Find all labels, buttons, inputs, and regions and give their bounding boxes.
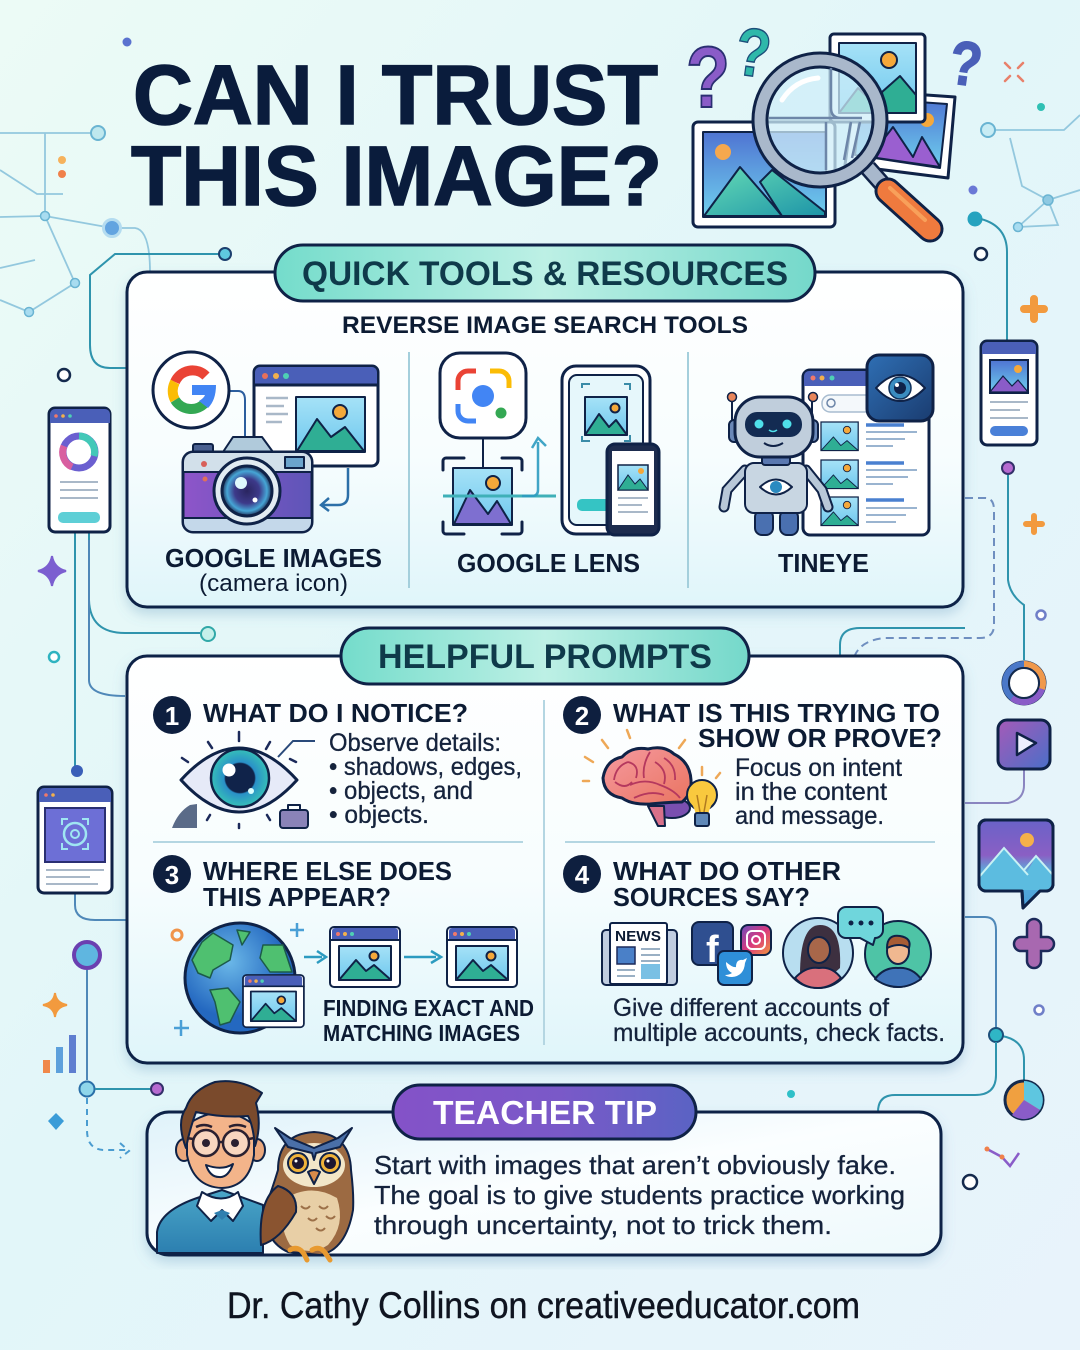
top photo [830, 34, 925, 122]
side card: image scan tablet [38, 787, 112, 893]
label: tineye: TINEYE [778, 548, 869, 578]
prompt 1: what do I notice [153, 696, 522, 829]
prompt 1: what do I notice: • objects. [329, 801, 429, 829]
tip text: The goal is to give students practice working [374, 1180, 905, 1210]
icon: eye [172, 732, 315, 828]
prompt 3: where else does this appear: 3 [165, 860, 179, 890]
tool: tineye [724, 355, 933, 535]
heading pill: helpful prompts: HELPFUL PROMPTS [378, 638, 712, 676]
prompt 4: what do other sources say: Give different accounts of [613, 994, 889, 1022]
icon: social media [692, 922, 771, 985]
icon: social media: f [706, 929, 719, 971]
prompt 3: where else does this appear: WHERE ELSE DOES [203, 856, 452, 886]
icon: brain and light bulb [583, 730, 720, 826]
panel: teacher tip [147, 1081, 941, 1260]
side card: phone with image [981, 341, 1037, 445]
heading pill: teacher tip [393, 1085, 696, 1139]
side icon: image speech bubble [979, 820, 1053, 908]
prompt 4: what do other sources say: 4 [575, 860, 590, 890]
icon: newspaper: NEWS [615, 928, 661, 945]
ring [1002, 660, 1046, 706]
prompt 1: what do I notice: Observe details: [329, 729, 501, 757]
prompt 1: what do I notice: WHAT DO I NOTICE? [203, 698, 468, 728]
label: google images: GOOGLE IMAGES [165, 543, 382, 573]
icon: magnifying glass over images with question marks: ? [730, 13, 776, 93]
prompt 1: what do I notice: • shadows, edges, [329, 753, 522, 781]
prompt 4: what do other sources say: multiple accounts, check facts. [613, 1019, 945, 1047]
footer credit: Dr. Cathy Collins on creativeeducator.com [227, 1285, 860, 1326]
prompt 1: what do I notice: 1 [165, 701, 179, 731]
prompt 1: what do I notice: • objects, and [329, 777, 473, 805]
prompt 2: what is this trying to show or prove: SHOW OR PROVE? [698, 723, 942, 753]
right photo [845, 90, 955, 178]
illustration: owl [261, 1128, 353, 1260]
tip text: through uncertainty, not to trick them. [374, 1210, 832, 1240]
prompt 4: what do other sources say: SOURCES SAY? [613, 882, 810, 912]
icon: newspaper [602, 923, 677, 985]
lens [760, 60, 880, 180]
prompt 3: where else does this appear: THIS APPEAR? [203, 882, 391, 912]
tip text [374, 1150, 905, 1240]
icon: matching image windows with arrows [304, 927, 517, 987]
heading pill: quick tools: QUICK TOOLS & RESOURCES [302, 255, 788, 293]
prompt 2: what is this trying to show or prove: in the content [735, 778, 887, 806]
prompt 2: what is this trying to show or prove: Focus on intent [735, 754, 902, 782]
icon: magnifying glass over images with question marks: ? [686, 30, 730, 126]
icon: people discussing [783, 907, 931, 988]
prompt 2: what is this trying to show or prove: WHAT IS THIS TRYING TO [613, 698, 940, 728]
illustration: teacher [157, 1081, 265, 1253]
subheading: REVERSE IMAGE SEARCH TOOLS [342, 312, 748, 339]
prompt 3: where else does this appear: MATCHING IMAGES [323, 1020, 520, 1046]
panel: quick tools and resources [127, 245, 963, 607]
panel: helpful prompts [127, 628, 963, 1063]
title: THIS IMAGE? [131, 129, 662, 223]
prompt 2: what is this trying to show or prove: and message. [735, 802, 884, 830]
label: google images [165, 543, 382, 597]
title [131, 48, 662, 223]
tool: google lens [440, 353, 659, 535]
left photo [693, 122, 835, 227]
icon: globe [172, 923, 304, 1036]
prompt 2: what is this trying to show or prove [563, 696, 942, 830]
tool: google images [153, 352, 378, 532]
right side network [988, 115, 1080, 227]
prompt 4: what do other sources say [563, 855, 945, 1047]
label: google lens: GOOGLE LENS [457, 548, 640, 578]
prompt 3: where else does this appear [153, 855, 534, 1046]
tip text: Start with images that aren’t obviously fake. [374, 1150, 896, 1180]
side card: phone with donut chart [49, 408, 110, 532]
icon: magnifying glass over images with question marks: ? [945, 28, 986, 101]
title: CAN I TRUST [133, 48, 658, 142]
heading pill: teacher tip: TEACHER TIP [433, 1094, 657, 1131]
prompt 4: what do other sources say: WHAT DO OTHER [613, 856, 841, 886]
label: google images: (camera icon) [199, 570, 348, 597]
prompt 3: where else does this appear: FINDING EXACT AND [323, 995, 534, 1021]
prompt 2: what is this trying to show or prove: 2 [575, 701, 589, 731]
handle [868, 168, 930, 229]
icon: magnifying glass over images with question marks [686, 13, 986, 229]
heading pill: quick tools [275, 245, 815, 301]
heading pill: helpful prompts [341, 628, 749, 684]
